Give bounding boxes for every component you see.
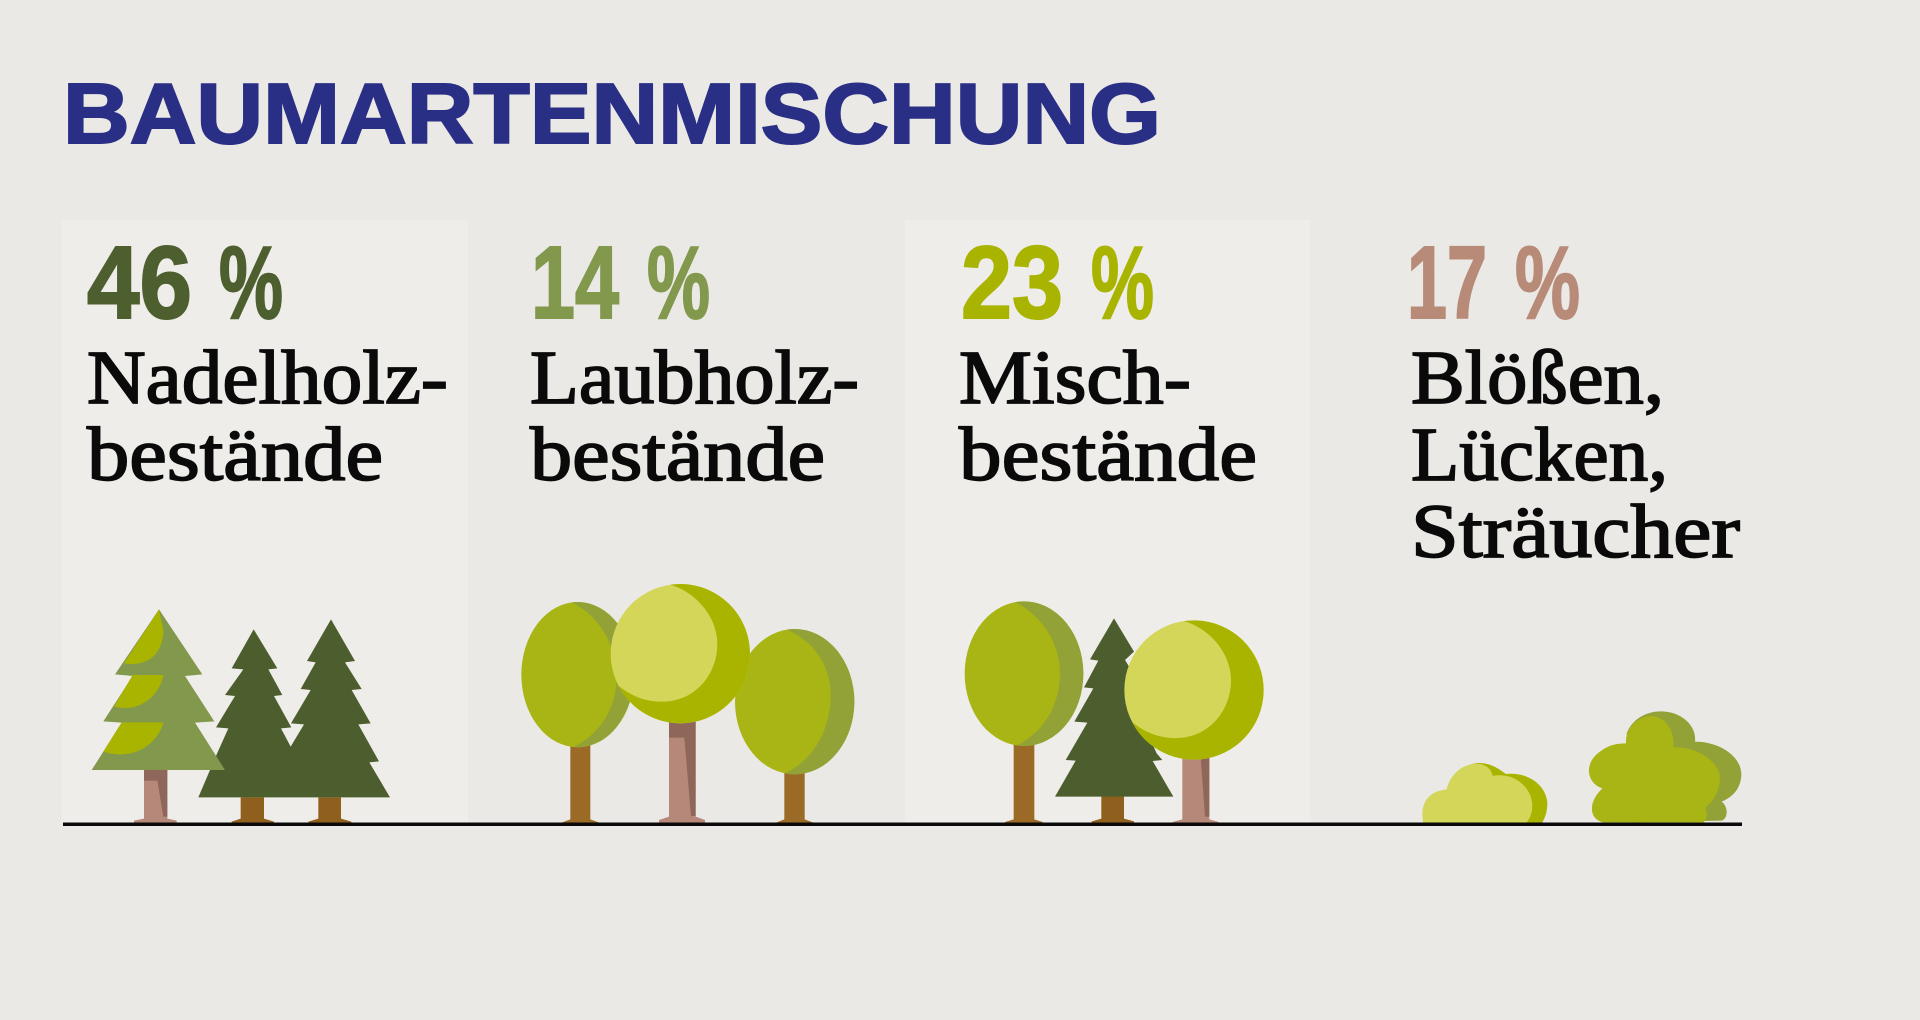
ground line: [63, 822, 1742, 826]
percentage 46 %: 46: [87, 225, 192, 340]
label: Nadelholzbestände: bestände: [87, 413, 383, 497]
label: Nadelholzbestände: Nadelholz-: [87, 336, 448, 420]
panel: Laubholzbestände: [521, 225, 859, 824]
percentage 23 %: %: [1091, 225, 1154, 340]
label: Laubholzbestände: bestände: [530, 413, 825, 497]
percentage 14 %: 14: [531, 225, 619, 340]
percentage 14 %: %: [647, 225, 710, 340]
percentage 46 %: %: [219, 225, 283, 340]
label: Blößen, Lücken, Sträucher: Lücken,: [1411, 413, 1668, 497]
label: Blößen, Lücken, Sträucher: Blößen,: [1411, 336, 1664, 420]
percentage 17 %: %: [1515, 225, 1580, 340]
panel: Mischbestände: [905, 220, 1310, 824]
title: BAUMARTENMISCHUNG: [63, 67, 1161, 162]
panel: Blößen, Lücken, Sträucher: [1407, 225, 1741, 823]
label: Mischbestände: bestände: [959, 413, 1257, 497]
percentage 17 %: 17: [1407, 225, 1487, 340]
label: Blößen, Lücken, Sträucher: Sträucher: [1411, 490, 1740, 574]
percentage 23 %: 23: [961, 225, 1063, 340]
label: Laubholzbestände: Laubholz-: [530, 336, 859, 420]
icon: shrubs: [1422, 711, 1741, 823]
panel: Nadelholzbestände: [62, 220, 468, 824]
icon: conifer trees: [92, 609, 390, 824]
label: Mischbestände: Misch-: [959, 336, 1191, 420]
icon: mixed trees: [965, 601, 1264, 824]
icon: deciduous trees: [521, 584, 854, 824]
